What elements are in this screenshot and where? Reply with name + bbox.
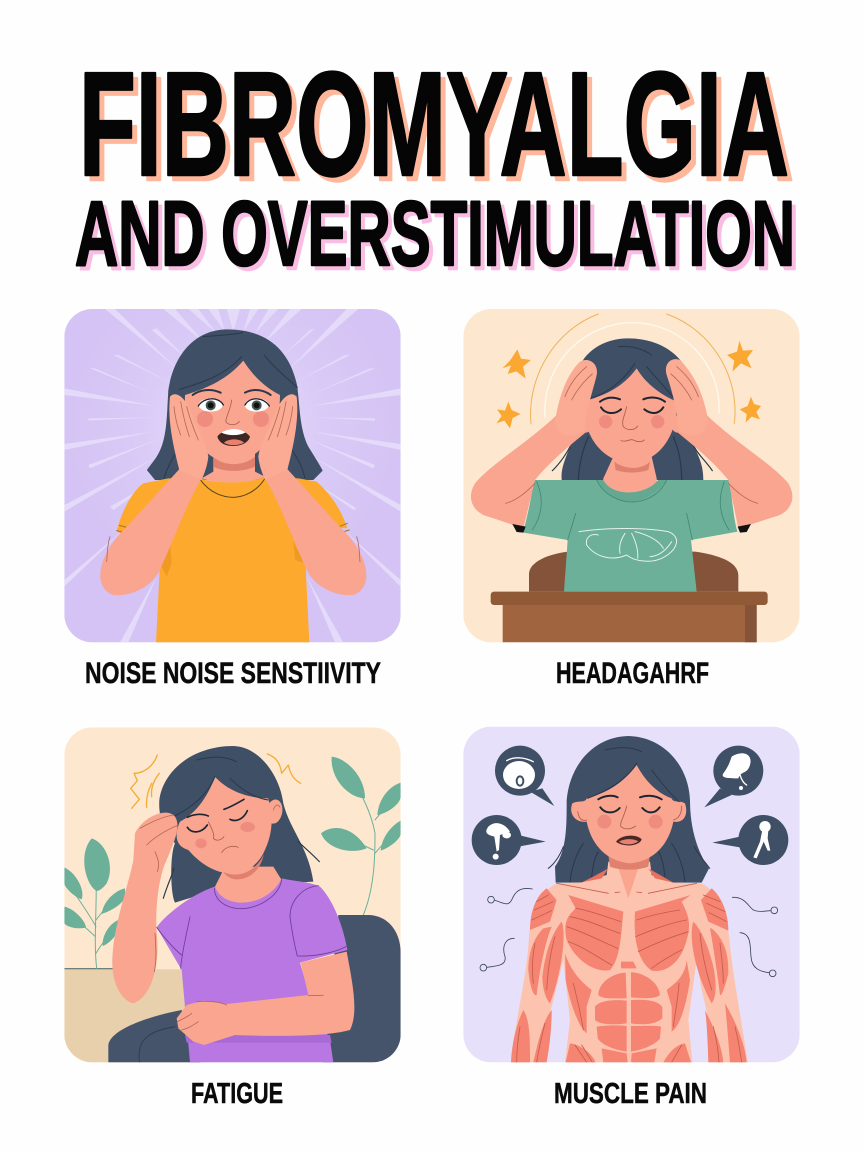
chin shadow bbox=[608, 855, 650, 870]
chair bbox=[529, 552, 738, 592]
nose bbox=[226, 400, 239, 425]
abdominal muscles bbox=[565, 953, 691, 1062]
sternum V bbox=[617, 865, 639, 898]
cheeks bbox=[197, 411, 213, 427]
panel: noise sensitivity bbox=[64, 309, 401, 642]
face bbox=[185, 361, 280, 463]
label: headache: HEADAGAHRF bbox=[556, 657, 709, 690]
mouth bbox=[616, 836, 642, 845]
closed eyes bbox=[600, 398, 665, 413]
left arm and hand on temple bbox=[112, 813, 178, 1003]
liver outline on shirt bbox=[579, 529, 677, 561]
sleeve cuffs bbox=[117, 523, 349, 533]
pain sparks bbox=[131, 754, 301, 808]
neck bbox=[603, 456, 657, 492]
face bbox=[571, 765, 686, 863]
nerve squiggles bbox=[480, 888, 778, 977]
pain arcs bbox=[531, 314, 735, 424]
plant left bbox=[64, 838, 125, 968]
sofa bbox=[323, 915, 401, 1062]
face bbox=[583, 368, 677, 464]
pain bubbles bbox=[472, 746, 788, 865]
hair strands bbox=[173, 757, 268, 817]
neck bbox=[202, 453, 265, 482]
arm muscles bbox=[511, 922, 747, 1062]
sound rays bbox=[64, 309, 401, 642]
face bbox=[177, 777, 272, 874]
mouth bbox=[217, 429, 250, 446]
hair strands bbox=[590, 346, 674, 399]
hair strands bbox=[179, 332, 297, 389]
cheeks bbox=[597, 815, 611, 829]
panel: fatigue bbox=[64, 727, 401, 1062]
bubble icons bbox=[486, 753, 771, 860]
right arm and hand bbox=[258, 394, 366, 595]
right arm and hand bbox=[666, 359, 792, 533]
shirt bbox=[117, 477, 347, 642]
left arm and hand bbox=[100, 394, 208, 595]
stars bbox=[496, 341, 761, 428]
hair bbox=[159, 746, 313, 903]
chest muscles bbox=[565, 895, 691, 971]
label: noise sensitivity: NOISE NOISE SENSTIIVITY bbox=[85, 657, 381, 690]
eyes bbox=[193, 390, 271, 412]
shirt bbox=[157, 878, 347, 1062]
shirt bbox=[523, 480, 738, 592]
panel: headache bbox=[463, 309, 800, 642]
neck bbox=[214, 866, 282, 903]
left arm and hand bbox=[471, 360, 597, 533]
nose and mouth bbox=[208, 822, 238, 853]
hair bbox=[562, 338, 703, 480]
cheeks bbox=[599, 415, 612, 428]
trapezius bbox=[582, 868, 673, 883]
nose bbox=[621, 806, 636, 829]
cheeks bbox=[195, 838, 207, 848]
shoulder muscles bbox=[530, 888, 728, 931]
panel: muscle pain bbox=[463, 727, 800, 1062]
collar line bbox=[200, 478, 265, 497]
nose and mouth bbox=[621, 407, 644, 442]
label: muscle pain: MUSCLE PAIN bbox=[554, 1078, 707, 1110]
right arm and lap hand bbox=[177, 952, 354, 1045]
hair strands bbox=[588, 748, 679, 802]
closed eyes and brows bbox=[598, 796, 662, 812]
hair bbox=[555, 736, 709, 883]
ears bbox=[584, 422, 589, 433]
plant right bbox=[321, 757, 401, 915]
eyes and brows bbox=[187, 799, 247, 832]
desk bbox=[491, 592, 768, 642]
title bbox=[75, 42, 799, 289]
ledge bbox=[64, 969, 204, 1062]
torso and arm base bbox=[511, 862, 748, 1062]
hair bbox=[147, 329, 323, 480]
label: fatigue: FATIGUE bbox=[191, 1078, 283, 1110]
